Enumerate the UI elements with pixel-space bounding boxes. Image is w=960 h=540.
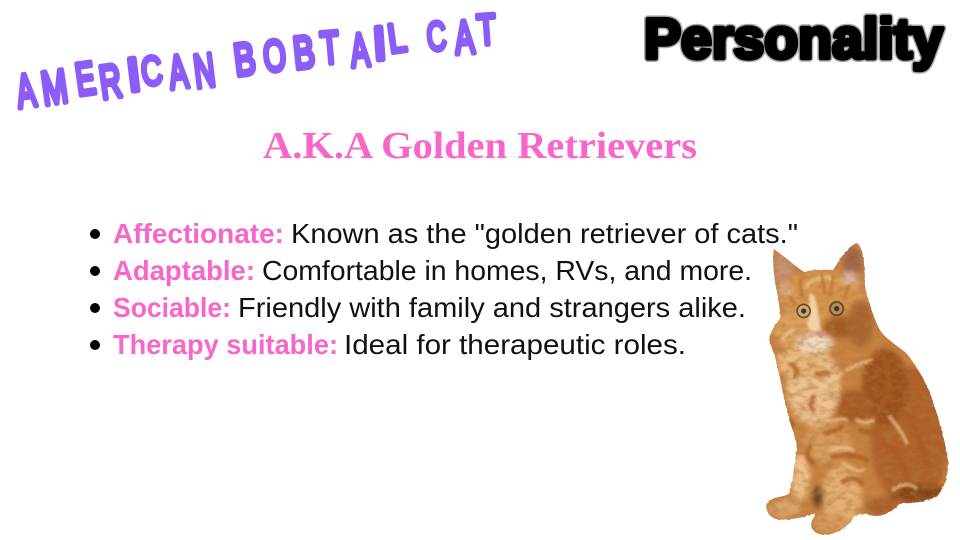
- title: American Bobtail Cat: A: [348, 24, 372, 78]
- title: American Bobtail Cat: T: [319, 23, 342, 75]
- bullet: adaptable: Adaptable:: [113, 255, 255, 286]
- kitten nose: [815, 331, 826, 339]
- title: American Bobtail Cat: C: [425, 14, 448, 60]
- bullet: adaptable: Comfortable in homes, RVs, and more.: [262, 255, 752, 286]
- bullet: affectionate: Affectionate:: [113, 218, 284, 249]
- title: American Bobtail Cat: L: [385, 14, 409, 62]
- title: American Bobtail Cat: N: [191, 45, 218, 99]
- bullet: therapy suitable: Therapy suitable:: [113, 329, 338, 360]
- title: Personality: Personality: [644, 7, 943, 71]
- title: American Bobtail Cat: [13, 5, 498, 119]
- kitten blaze: [807, 293, 821, 332]
- title: American Bobtail Cat: I: [124, 49, 144, 102]
- title: Personality: Personality: [644, 7, 943, 71]
- bullet: therapy suitable: Ideal for therapeutic roles.: [344, 329, 686, 360]
- bullet: affectionate: [90, 218, 798, 249]
- bullet: sociable: Sociable:: [113, 292, 231, 323]
- title: American Bobtail Cat: C: [139, 48, 165, 95]
- bullet: affectionate: Known as the "golden retriever of cats.": [291, 218, 798, 249]
- title: American Bobtail Cat: O: [261, 30, 288, 81]
- title: American Bobtail Cat: B: [231, 33, 258, 86]
- title: American Bobtail Cat: E: [72, 53, 99, 106]
- subtitle: A.K.A Golden Retrievers: [263, 125, 697, 167]
- kitten fur strokes: [780, 273, 927, 490]
- title: American Bobtail Cat: R: [96, 55, 125, 110]
- title: American Bobtail Cat: T: [475, 5, 498, 54]
- title: American Bobtail Cat: B: [291, 26, 317, 79]
- bullet: sociable: Friendly with family and strangers alike.: [238, 292, 746, 323]
- title: American Bobtail Cat: A: [166, 46, 191, 100]
- title: American Bobtail Cat: M: [38, 60, 71, 116]
- icon: orange kitten illustration: [766, 243, 949, 536]
- title: American Bobtail Cat: A: [453, 12, 476, 65]
- bullet list: [90, 218, 798, 360]
- bullet: therapy suitable: [90, 329, 686, 360]
- title: American Bobtail Cat: I: [371, 18, 388, 71]
- kitten eyes: [796, 301, 844, 318]
- title: American Bobtail Cat: A: [13, 64, 39, 119]
